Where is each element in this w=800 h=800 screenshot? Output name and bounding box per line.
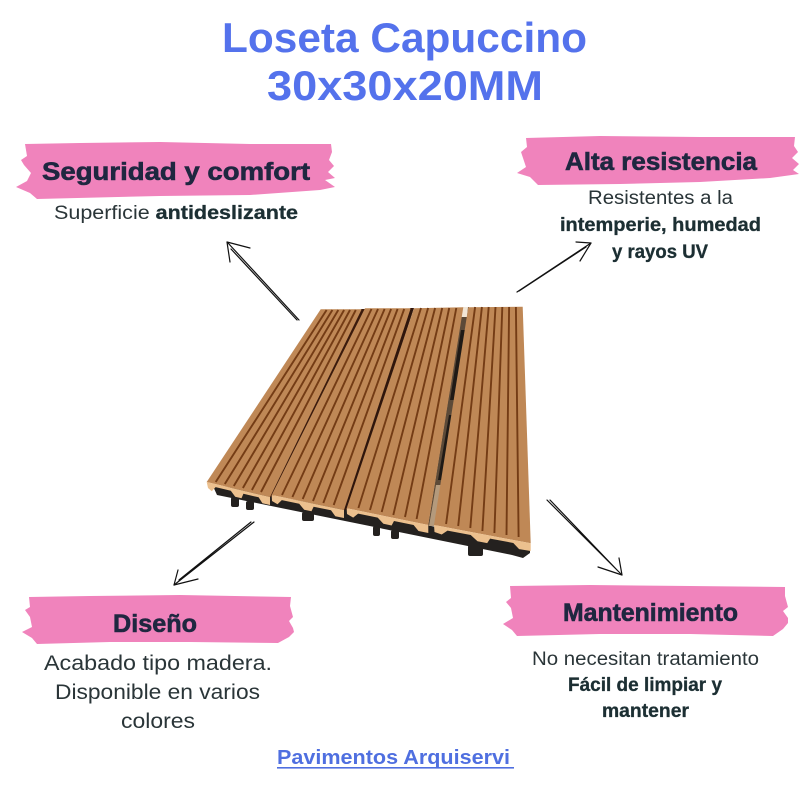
- description: mantener: [602, 701, 690, 722]
- description: intemperie, humedad: [560, 215, 761, 236]
- title: 30x30x20MM: [267, 62, 543, 109]
- heading: Alta resistencia: [565, 148, 758, 176]
- panel: diseno: [22, 595, 294, 733]
- arrow: to mantenimiento: [547, 500, 622, 575]
- heading: Diseño: [113, 610, 197, 638]
- description: Superficie antideslizante: [54, 203, 298, 224]
- description: Fácil de limpiar y: [568, 675, 722, 696]
- description: No necesitan tratamiento: [532, 649, 759, 670]
- gaps between planks: [268, 307, 469, 526]
- description: [532, 649, 759, 722]
- description: Resistentes a la: [588, 188, 733, 209]
- description: Disponible en varios: [55, 681, 260, 704]
- description: Acabado tipo madera.: [44, 652, 272, 675]
- description: y rayos UV: [612, 242, 708, 263]
- arrow: to seguridad y comfort: [227, 242, 299, 320]
- cream plank front edges: [207, 482, 531, 551]
- pink brush banner: [503, 585, 788, 636]
- description: colores: [121, 710, 195, 733]
- panel: alta resistencia: [517, 136, 799, 263]
- panel: mantenimiento: [503, 585, 788, 722]
- heading: Mantenimiento: [563, 599, 738, 627]
- arrow: to alta resistencia: [517, 242, 591, 292]
- description: [560, 188, 761, 263]
- panel: seguridad y comfort: [16, 142, 335, 224]
- pink brush banner: [16, 142, 335, 199]
- title: [222, 14, 587, 109]
- arrow: to diseno: [174, 522, 254, 585]
- pink brush banner: [22, 595, 294, 644]
- heading: Seguridad y comfort: [42, 158, 311, 186]
- product image: wood deck tile: [207, 307, 531, 558]
- title: Loseta Capuccino: [222, 14, 587, 61]
- plank grooves: [216, 307, 519, 537]
- pink brush banner: [517, 136, 799, 185]
- wood planks: [207, 307, 531, 543]
- footer link: Pavimentos Arquiservi: [277, 747, 510, 769]
- black plastic base: [212, 484, 530, 558]
- description: [44, 652, 272, 733]
